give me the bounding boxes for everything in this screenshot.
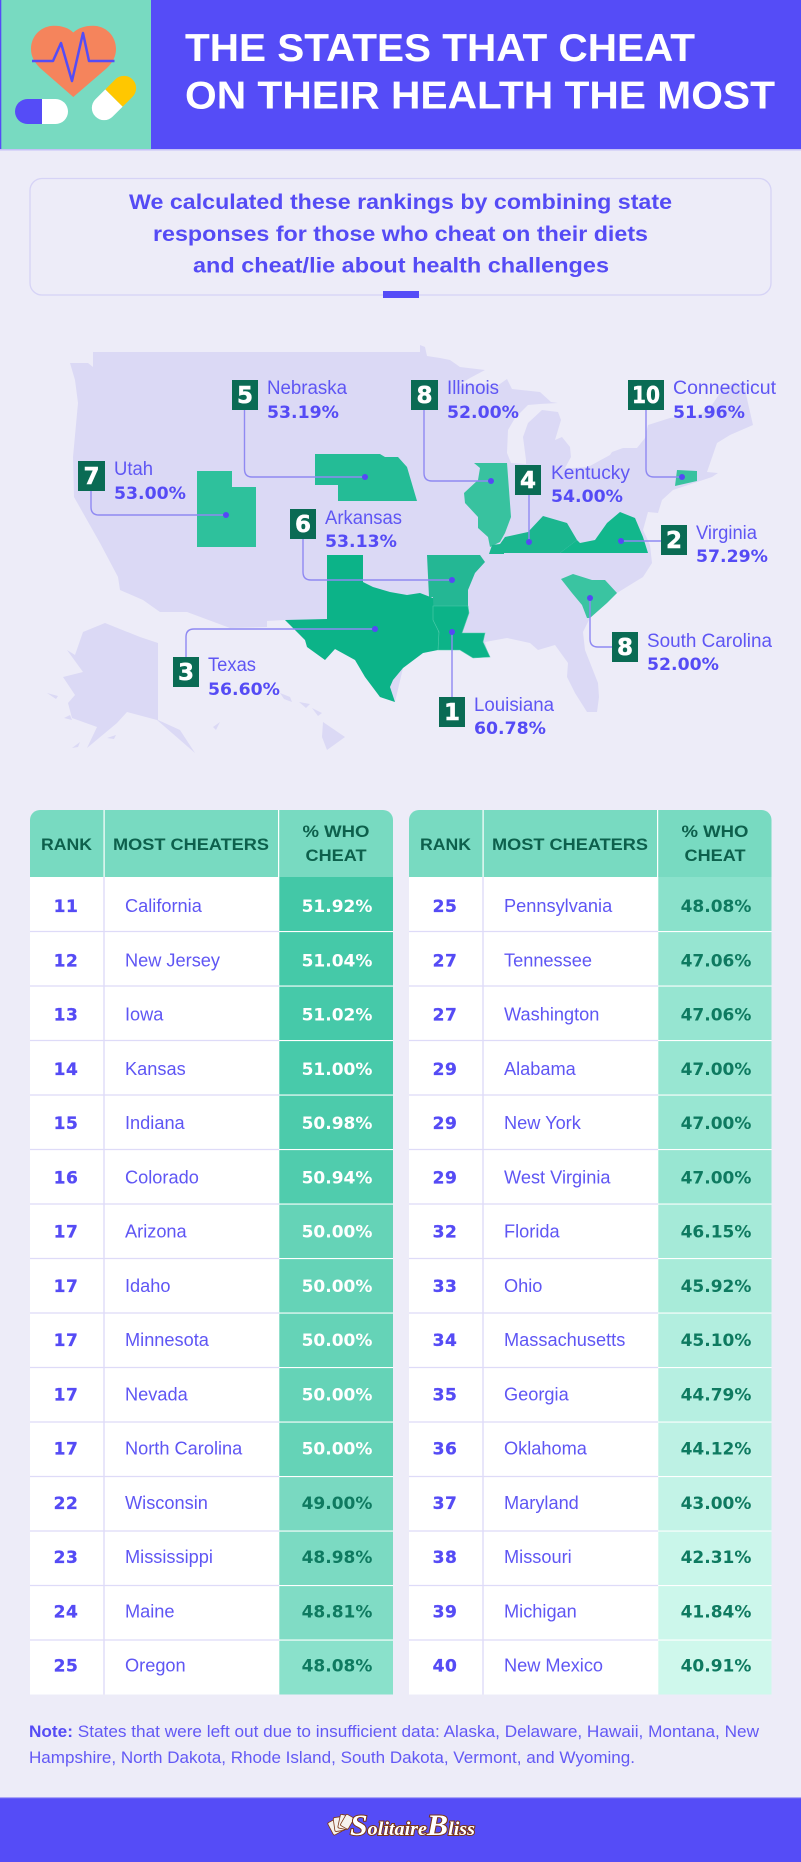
intro text box: responses for those who cheat on their diets [153, 222, 648, 246]
row: 40 New Mexico: 40 [433, 1657, 457, 1677]
row: 11 California [54, 896, 372, 917]
row: 36 Oklahoma [433, 1439, 751, 1460]
row: 11 California: 11 [54, 897, 78, 917]
left table header: CHEAT [306, 846, 367, 865]
row: 17 Nevada: 17 [54, 1385, 78, 1405]
callout: 5 Nebraska: Nebraska [267, 378, 347, 399]
row: 38 Missouri: Missouri [504, 1547, 572, 1567]
callout: 4 Kentucky [515, 463, 631, 545]
state: Kentucky [489, 516, 577, 554]
row: 15 Indiana: Indiana [125, 1113, 186, 1133]
base map: lower 48, Alaska, Hawaii [47, 345, 753, 753]
callout: 8 Illinois: Illinois [447, 378, 499, 399]
callout: 2 Virginia: Virginia [696, 523, 757, 544]
left table grid lines [30, 877, 279, 1694]
row: 23 Mississippi [54, 1547, 372, 1568]
row: 40 New Mexico: New Mexico [504, 1656, 603, 1676]
row: 17 Minnesota: Minnesota [125, 1330, 210, 1350]
row: 12 New Jersey [54, 950, 372, 971]
callout: 7 Utah: 53.00% [114, 484, 186, 504]
row: 32 Florida: 32 [433, 1223, 457, 1243]
right table: ranks 25 to 40 [409, 810, 772, 1694]
callout: 10 Connecticut: 51.96% [673, 403, 745, 423]
right table header: MOST CHEATERS [492, 835, 648, 854]
callout: 4 Kentucky: 54.00% [551, 487, 623, 507]
row: 25 Oregon [54, 1656, 372, 1677]
row: 27 Tennessee: Tennessee [504, 950, 592, 970]
row: 15 Indiana [54, 1113, 372, 1134]
row: 15 Indiana: 50.98% [302, 1114, 372, 1134]
intro text box [30, 178, 771, 298]
title: ON THEIR HEALTH THE MOST [185, 74, 775, 118]
row: 14 Kansas: 51.00% [302, 1060, 372, 1080]
row: 29 West Virginia: 29 [433, 1168, 457, 1188]
row: 36 Oklahoma: 36 [433, 1440, 457, 1460]
row: 36 Oklahoma: Oklahoma [504, 1439, 588, 1459]
row: 25 Pennsylvania: 25 [433, 897, 457, 917]
row: 40 New Mexico [433, 1656, 751, 1677]
row: 17 North Carolina: 17 [54, 1440, 78, 1460]
callout: 1 Louisiana: 1 [444, 700, 460, 726]
row: 27 Washington: 27 [433, 1006, 457, 1026]
row: 29 West Virginia [433, 1167, 751, 1188]
row: 32 Florida: Florida [504, 1222, 560, 1242]
row: 27 Washington: 47.06% [681, 1006, 751, 1026]
note: Hampshire, North Dakota, Rhode Island, South Dakota, Vermont, and Wyoming. [29, 1749, 635, 1767]
note [29, 1723, 759, 1767]
row: 27 Washington [433, 1004, 751, 1026]
row: 16 Colorado [54, 1167, 372, 1188]
row: 17 Minnesota: 17 [54, 1331, 78, 1351]
state: Utah [197, 471, 256, 547]
row: 17 Arizona: Arizona [125, 1222, 188, 1242]
row: 37 Maryland: 43.00% [681, 1494, 751, 1514]
callout: 8 Illinois: 8 [416, 383, 433, 409]
callout: 6 Arkansas: 6 [295, 512, 311, 538]
row: 39 Michigan: 41.84% [681, 1602, 751, 1622]
row: 39 Michigan [433, 1601, 751, 1622]
row: 17 Idaho: 50.00% [302, 1277, 372, 1297]
callout: 1 Louisiana: Louisiana [474, 695, 554, 716]
callout: 6 Arkansas: Arkansas [325, 508, 402, 529]
row: 29 Alabama [433, 1059, 751, 1080]
row: 12 New Jersey: New Jersey [125, 950, 221, 970]
callout: 7 Utah: 7 [83, 464, 100, 490]
row: 22 Wisconsin: 49.00% [302, 1494, 372, 1514]
row: 24 Maine: Maine [125, 1601, 175, 1621]
row: 38 Missouri: 42.31% [681, 1548, 751, 1568]
right table header: CHEAT [684, 846, 746, 865]
row: 29 New York [433, 1113, 751, 1134]
header banner [0, 0, 801, 150]
row: 29 West Virginia: 47.00% [681, 1168, 751, 1188]
state: Connecticut [675, 470, 697, 486]
row: 25 Oregon: 25 [54, 1657, 78, 1677]
row: 17 Nevada [54, 1384, 372, 1405]
note: Note: States that were left out due to insufficient data: Alaska, Delaware, Hawaii, Montana, New [29, 1723, 759, 1741]
callout: 8 South Carolina: South Carolina [647, 631, 772, 652]
row: 35 Georgia: 44.79% [681, 1385, 751, 1405]
row: 27 Tennessee: 27 [433, 951, 457, 971]
right table percent cells [658, 877, 772, 1694]
row: 12 New Jersey: 12 [54, 951, 78, 971]
row: 33 Ohio: 33 [433, 1277, 457, 1297]
left table header: RANK [41, 835, 93, 854]
right table header: RANK [420, 835, 472, 854]
icon: yellow and white pill [87, 71, 141, 125]
intro text box: and cheat/lie about health challenges [193, 254, 609, 278]
row: 32 Florida: 46.15% [681, 1223, 751, 1243]
row: 17 Idaho: Idaho [125, 1276, 171, 1296]
row: 33 Ohio: Ohio [504, 1276, 542, 1296]
icon panel: heart and pills [1, 0, 151, 149]
callout: 3 Texas: 3 [178, 660, 194, 686]
row: 27 Tennessee: 47.06% [681, 951, 751, 971]
callout: 5 Nebraska: 53.19% [267, 403, 339, 423]
row: 17 Minnesota [54, 1330, 372, 1351]
row: 24 Maine: 48.81% [302, 1602, 372, 1622]
callout: 8 South Carolina: 52.00% [647, 655, 719, 675]
callout: 3 Texas: 56.60% [208, 680, 280, 700]
row: 35 Georgia [433, 1384, 751, 1405]
state: Louisiana [433, 606, 490, 658]
icon: heart with pulse [31, 26, 116, 97]
row: 29 Alabama: Alabama [504, 1059, 577, 1079]
row: 25 Pennsylvania: 48.08% [681, 897, 751, 917]
right table header [409, 810, 772, 877]
row: 22 Wisconsin [54, 1493, 372, 1514]
row: 17 Idaho: 17 [54, 1277, 78, 1297]
row: 29 West Virginia: West Virginia [504, 1167, 611, 1187]
row: 36 Oklahoma: 44.12% [681, 1440, 751, 1460]
callout: 3 Texas [173, 626, 378, 700]
callout: 1 Louisiana [439, 629, 554, 739]
state: Virginia [560, 512, 648, 553]
row: 16 Colorado: 50.94% [302, 1168, 372, 1188]
callout: 8 South Carolina: 8 [617, 635, 633, 661]
row: 14 Kansas: Kansas [125, 1059, 186, 1079]
callout: 4 Kentucky: Kentucky [551, 463, 631, 484]
callout: 10 Connecticut [628, 378, 777, 480]
row: 24 Maine: 24 [54, 1602, 78, 1622]
row: 17 Idaho [54, 1276, 372, 1297]
right table grid lines [409, 877, 658, 1694]
left table header: MOST CHEATERS [113, 835, 269, 854]
row: 13 Iowa: Iowa [125, 1004, 164, 1024]
row: 17 Arizona: 50.00% [302, 1223, 372, 1243]
row: 37 Maryland: 37 [433, 1494, 457, 1514]
left table percent cells [279, 877, 393, 1694]
row: 37 Maryland [433, 1493, 751, 1514]
row: 33 Ohio [433, 1276, 751, 1297]
row: 17 Arizona [54, 1222, 372, 1243]
row: 38 Missouri [433, 1547, 751, 1568]
row: 27 Tennessee [433, 950, 751, 971]
row: 17 Arizona: 17 [54, 1223, 78, 1243]
callout: 2 Virginia: 57.29% [696, 547, 768, 567]
callout: 3 Texas: Texas [208, 655, 256, 676]
row: 17 North Carolina: 50.00% [302, 1440, 372, 1460]
row: 13 Iowa: 51.02% [302, 1006, 372, 1026]
row: 16 Colorado: 16 [54, 1168, 78, 1188]
row: 17 Nevada: 50.00% [302, 1385, 372, 1405]
state: Illinois [464, 463, 511, 547]
row: 25 Oregon: 48.08% [302, 1657, 372, 1677]
map of the United States [47, 345, 777, 753]
row: 17 Nevada: Nevada [125, 1384, 189, 1404]
right table header: % WHO [682, 822, 748, 841]
callout: 1 Louisiana: 60.78% [474, 719, 546, 739]
left table header [30, 810, 393, 877]
state: Arkansas [427, 555, 485, 606]
row: 23 Mississippi: Mississippi [125, 1547, 213, 1567]
row: 12 New Jersey: 51.04% [302, 951, 372, 971]
callout: 5 Nebraska: 5 [237, 383, 253, 409]
callout: 6 Arkansas: 53.13% [325, 532, 397, 552]
callout: 4 Kentucky: 4 [520, 468, 536, 494]
row: 25 Oregon: Oregon [125, 1656, 186, 1676]
row: 17 North Carolina [54, 1439, 372, 1460]
row: 14 Kansas [54, 1059, 372, 1080]
row: 29 Alabama: 29 [433, 1060, 457, 1080]
row: 23 Mississippi: 23 [54, 1548, 78, 1568]
row: 39 Michigan: Michigan [504, 1601, 577, 1621]
left table header: % WHO [302, 822, 370, 841]
row: 14 Kansas: 14 [54, 1060, 78, 1080]
row: 13 Iowa [54, 1004, 372, 1026]
icon: playing cards fan [327, 1814, 354, 1836]
row: 32 Florida [433, 1222, 751, 1243]
row: 38 Missouri: 38 [433, 1548, 457, 1568]
row: 22 Wisconsin: 22 [54, 1494, 78, 1514]
left table: ranks 11 to 25 [30, 810, 393, 1694]
row: 33 Ohio: 45.92% [681, 1277, 751, 1297]
row: 11 California: 51.92% [302, 897, 372, 917]
callout: 2 Virginia: 2 [666, 528, 682, 554]
state: South Carolina [561, 574, 617, 618]
row: 34 Massachusetts: 45.10% [681, 1331, 751, 1351]
intro text box: We calculated these rankings by combining state [129, 190, 672, 214]
logo: Solitaire Bliss: SolitaireBliss [350, 1809, 475, 1842]
row: 25 Pennsylvania [433, 896, 751, 917]
callout: 5 Nebraska [232, 378, 368, 480]
row: 29 Alabama: 47.00% [681, 1060, 751, 1080]
row: 29 New York: New York [504, 1113, 582, 1133]
row: 34 Massachusetts: Massachusetts [504, 1330, 625, 1350]
title: THE STATES THAT CHEAT [185, 27, 695, 70]
callout: 8 South Carolina [587, 595, 772, 675]
row: 40 New Mexico: 40.91% [681, 1657, 751, 1677]
state: Nebraska [315, 454, 417, 501]
row: 15 Indiana: 15 [54, 1114, 78, 1134]
row: 17 North Carolina: North Carolina [125, 1439, 243, 1459]
callout: 8 Illinois: 52.00% [447, 403, 519, 423]
callout: 8 Illinois [411, 378, 519, 484]
row: 17 Minnesota: 50.00% [302, 1331, 372, 1351]
row: 34 Massachusetts [433, 1330, 751, 1351]
row: 22 Wisconsin: Wisconsin [125, 1493, 208, 1513]
title [185, 27, 775, 118]
row: 34 Massachusetts: 34 [433, 1331, 457, 1351]
row: 35 Georgia: Georgia [504, 1384, 570, 1404]
row: 29 New York: 29 [433, 1114, 457, 1134]
footer bar [0, 1797, 801, 1862]
state: Texas [285, 555, 439, 702]
callout: 10 Connecticut: 10 [632, 383, 660, 409]
row: 39 Michigan: 39 [433, 1602, 457, 1622]
row: 24 Maine [54, 1601, 372, 1622]
row: 11 California: California [125, 896, 203, 916]
callout: 7 Utah: Utah [114, 459, 153, 480]
row: 23 Mississippi: 48.98% [302, 1548, 372, 1568]
row: 37 Maryland: Maryland [504, 1493, 579, 1513]
row: 16 Colorado: Colorado [125, 1167, 199, 1187]
row: 25 Pennsylvania: Pennsylvania [504, 896, 613, 916]
row: 13 Iowa: 13 [54, 1006, 78, 1026]
callout: 6 Arkansas [290, 508, 455, 583]
row: 29 New York: 47.00% [681, 1114, 751, 1134]
row: 27 Washington: Washington [504, 1004, 599, 1024]
row: 35 Georgia: 35 [433, 1385, 457, 1405]
callout: 10 Connecticut: Connecticut [673, 378, 777, 399]
icon: blue and white pill [15, 99, 68, 124]
callout: 2 Virginia [618, 523, 768, 567]
callout: 7 Utah [78, 459, 229, 518]
